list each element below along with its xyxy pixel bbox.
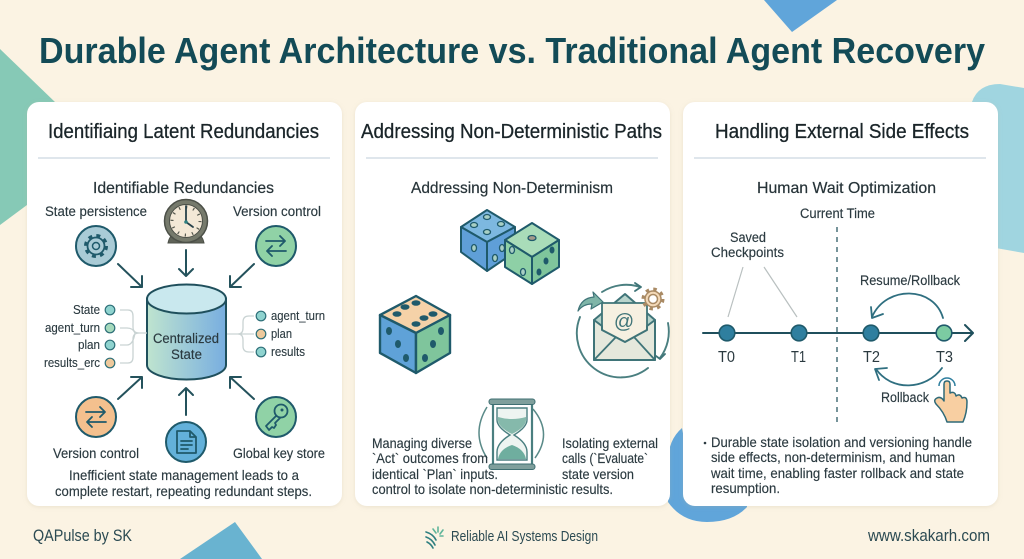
panel: external side effects <box>683 102 998 506</box>
label: state persistence: State persistence <box>45 204 147 219</box>
decorative light blue shape right <box>972 84 1024 253</box>
icon: pointing hand <box>935 378 967 422</box>
icon: clock <box>164 200 208 243</box>
bullet text <box>704 434 972 496</box>
left state fields: plan <box>78 338 100 352</box>
footer: center tag: Reliable AI Systems Design <box>451 529 598 545</box>
icon: hourglass <box>479 399 544 470</box>
title: Durable Agent Architecture vs. Traditional Agent Recovery <box>39 30 986 71</box>
right state fields <box>227 309 325 359</box>
checkpoint T0: T0 <box>718 349 735 366</box>
left state fields <box>44 303 147 370</box>
right state fields: agent_turn <box>271 309 325 323</box>
text: managing diverse outcomes: Managing diverse <box>372 435 472 451</box>
right state fields: plan <box>271 327 292 341</box>
icon: green die <box>505 223 559 284</box>
icon: green sync arrows <box>256 226 296 266</box>
caption <box>55 467 312 499</box>
checkpoint T3 <box>936 325 953 366</box>
checkpoint T3: T3 <box>936 349 953 366</box>
arrows into state bottom <box>118 377 254 415</box>
checkpoint T0 <box>718 325 735 366</box>
label: version control top: Version control <box>233 204 321 219</box>
checkpoint T1: T1 <box>791 349 806 366</box>
subheading: Human Wait Optimization <box>757 180 936 197</box>
decorative blue shape middle <box>668 428 747 522</box>
text: managing diverse outcomes: identical `Plan` inputs. <box>372 466 498 482</box>
arrow: resume rollback: Resume/Rollback <box>860 273 960 288</box>
text: managing diverse outcomes: `Act` outcomes from <box>372 450 488 466</box>
caption: complete restart, repeating redundant steps. <box>55 483 312 499</box>
text: isolating external calls: calls (`Evaluate` <box>562 450 648 466</box>
decorative blue shape top <box>764 0 837 32</box>
arrow: rollback: Rollback <box>881 390 929 405</box>
icon: key <box>256 397 296 437</box>
text: managing diverse outcomes: control to isolate non-deterministic results. <box>372 481 613 497</box>
icon: email with cycle and gear <box>577 283 669 377</box>
left state fields: agent_turn <box>45 321 100 335</box>
bullet text: Durable state isolation and versioning handle <box>711 434 972 450</box>
panel: non-deterministic paths <box>355 102 670 506</box>
subheading: Identifiable Redundancies <box>93 180 274 197</box>
icon: blue die <box>461 210 515 271</box>
panel heading: Handling External Side Effects <box>715 121 969 143</box>
database label: Centralized <box>153 331 219 346</box>
label: version control bottom: Version control <box>53 446 139 461</box>
footer: brand: QAPulse by SK <box>33 527 132 545</box>
icon: gear <box>76 226 116 266</box>
icon: footer logo <box>426 527 443 548</box>
subheading: Addressing Non-Determinism <box>411 180 613 197</box>
arrows into state top <box>118 250 254 287</box>
checkpoint T2: T2 <box>863 349 880 366</box>
panel heading: Identifiaing Latent Redundancies <box>48 121 319 143</box>
caption: Inefficient state management leads to a <box>69 467 299 483</box>
label: current time: Current Time <box>800 206 875 221</box>
label: saved checkpoints: Checkpoints <box>711 245 784 260</box>
text: managing diverse outcomes <box>372 435 613 497</box>
arrow: resume rollback <box>860 273 960 318</box>
text: isolating external calls: state version <box>562 466 634 482</box>
panel heading: Addressing Non-Deterministic Paths <box>361 121 662 143</box>
panel: latent redundancies <box>27 102 342 506</box>
checkpoint T2 <box>863 325 880 366</box>
left state fields: State <box>73 303 100 317</box>
database: centralized state: State <box>171 347 202 362</box>
bullet text: side effects, non-determinism, and human <box>711 449 955 465</box>
bullet text: wait time, enabling faster rollback and state <box>710 465 964 481</box>
label: saved checkpoints <box>711 230 797 317</box>
decorative teal shape left <box>0 49 56 225</box>
text: isolating external calls <box>562 435 658 482</box>
left state fields: results_erc <box>44 356 100 370</box>
decorative blue triangle bottom <box>180 522 262 559</box>
arrow: rollback <box>875 368 942 405</box>
footer: website: www.skakarh.com <box>867 527 990 545</box>
database: centralized state <box>147 284 226 380</box>
footer: center tag <box>426 527 598 548</box>
icon: orange sync arrows <box>76 397 116 437</box>
bullet text: resumption. <box>711 480 780 496</box>
label: saved checkpoints: Saved <box>730 230 766 245</box>
right state fields: results <box>271 345 305 359</box>
timeline <box>703 325 973 366</box>
text: isolating external calls: Isolating external <box>562 435 658 451</box>
label: global key store: Global key store <box>233 446 325 461</box>
icon: large die <box>380 296 450 373</box>
checkpoint T1 <box>791 325 807 366</box>
icon: document <box>166 422 206 462</box>
icon: email with cycle and gear: @ <box>614 311 634 333</box>
